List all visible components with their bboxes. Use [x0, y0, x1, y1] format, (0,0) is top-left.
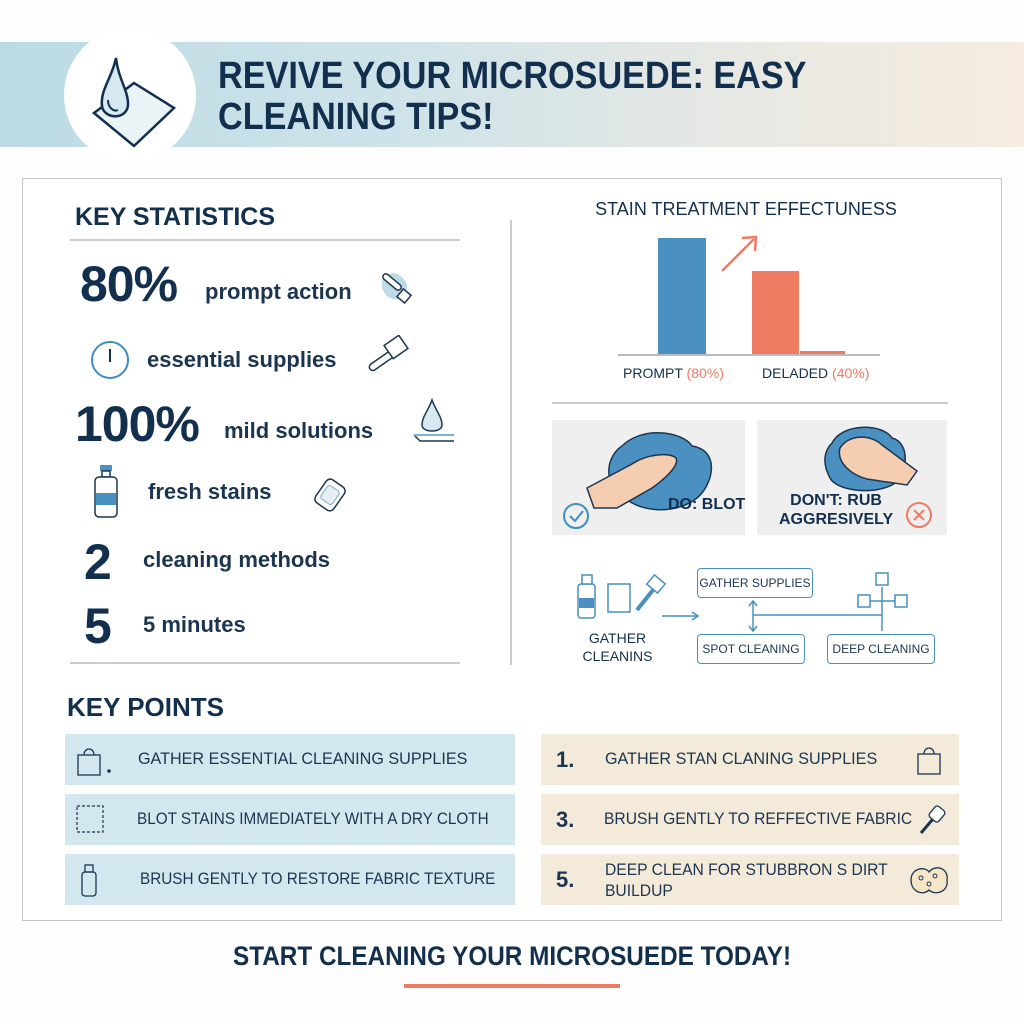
stat: fresh stains [94, 465, 272, 518]
label: gather cleanins [582, 630, 653, 664]
key points right column [541, 734, 959, 905]
header band [0, 42, 1024, 147]
title: CLEANING TIPS! [218, 96, 494, 138]
arrow [662, 611, 700, 621]
point 3: BRUSH GENTLY TO RESTORE FABRIC TEXTURE [140, 869, 495, 888]
title: REVIVE YOUR MICROSUEDE: EASY [218, 55, 806, 97]
chart title: STAIN TREATMENT EFFECTUNESS [595, 199, 897, 219]
stat: 5: 5 minutes [143, 612, 246, 637]
panel: don't rub: AGGRESIVELY [779, 511, 893, 528]
point 1. [541, 734, 959, 785]
key points left column [65, 734, 515, 905]
icon: brush 1 [382, 273, 412, 304]
box: deep cleaning [827, 634, 935, 664]
point 1: GATHER ESSENTIAL CLEANING SUPPLIES [138, 749, 467, 768]
bar labels: PROMPT (80%) [623, 365, 724, 381]
panel: don't rub [757, 420, 947, 535]
icon: brush 2 [368, 335, 409, 372]
panel: do blot: DO: BLOT [668, 496, 745, 513]
icon: check [563, 503, 589, 529]
stat: 5 [84, 598, 246, 654]
box: gather supplies [697, 568, 813, 598]
arrow: up [721, 236, 758, 272]
stat: 2: cleaning methods [143, 547, 330, 572]
point 3.: BRUSH GENTLY TO REFFECTIVE FABRIC [604, 809, 912, 828]
point 2 [65, 794, 515, 845]
point 1.: 1. [556, 747, 574, 772]
stat: 100% [75, 396, 373, 452]
point 5.: 5. [556, 867, 574, 892]
icon: phone [314, 478, 346, 512]
icon: supplies [577, 574, 666, 619]
point 5. [541, 854, 959, 905]
stat: 100%: 100% [75, 396, 199, 452]
stat: essential supplies [91, 341, 337, 379]
box: spot cleaning [697, 634, 805, 664]
chart: stain treatment effectiveness [595, 199, 897, 381]
footer call to action: START CLEANING YOUR MICROSUEDE TODAY! [233, 941, 791, 971]
panel: do blot [552, 420, 745, 535]
point 3 [65, 854, 515, 905]
icon: drop on cloth [64, 42, 196, 148]
chart: stain treatment effectiveness: DELADED (40%) [762, 365, 869, 381]
stat: 100%: mild solutions [224, 418, 373, 443]
box: spot cleaning: SPOT CLEANING [702, 642, 800, 656]
stat: 80%: prompt action [205, 279, 352, 304]
point 3. [541, 794, 959, 845]
point 2: BLOT STAINS IMMEDIATELY WITH A DRY CLOTH [137, 809, 489, 828]
stat: 5: 5 [84, 598, 111, 654]
main panel [22, 178, 1002, 921]
title [218, 55, 806, 138]
panel: key statistics [70, 203, 460, 664]
icon: x [906, 502, 932, 528]
box: gather supplies: GATHER SUPPLIES [699, 576, 811, 590]
panel: don't rub: DON'T: RUB [790, 492, 882, 509]
label: gather cleanins: GATHER [589, 630, 646, 646]
point 5.: BUILDUP [605, 881, 673, 900]
point 1 [65, 734, 515, 785]
heading: key statistics: KEY STATISTICS [75, 203, 275, 231]
heading: key points: KEY POINTS [67, 692, 224, 722]
icon: drop [414, 398, 454, 442]
label: gather cleanins: CLEANINS [582, 648, 653, 664]
point 3.: 3. [556, 807, 574, 832]
box: deep cleaning: DEEP CLEANING [832, 642, 930, 656]
point 1.: GATHER STAN CLANING SUPPLIES [605, 749, 877, 768]
stat: 80% [80, 256, 352, 312]
stat: 2 [84, 534, 330, 590]
flowchart [577, 568, 935, 664]
stat: 80%: 80% [80, 256, 177, 312]
stat: essential supplies: essential supplies [147, 347, 337, 372]
stat: 2: 2 [84, 534, 111, 590]
point 5.: DEEP CLEAN FOR STUBBRON S DIRT [605, 860, 888, 879]
stat: fresh stains: fresh stains [148, 479, 272, 504]
